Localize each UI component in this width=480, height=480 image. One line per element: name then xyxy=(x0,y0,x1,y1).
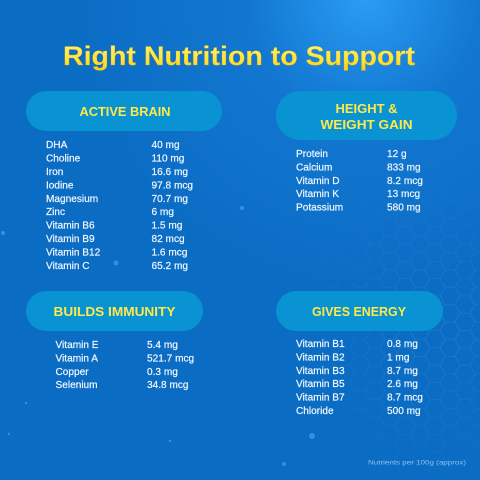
nutrient list: active brain: Zinc xyxy=(46,207,65,218)
heading pill: height and weight gain: WEIGHT GAIN xyxy=(320,117,412,132)
nutrient list: gives energy: Vitamin B7 xyxy=(296,393,345,404)
nutrient list: height and weight gain: 580 mg xyxy=(387,203,421,214)
nutrient list: gives energy: Chloride xyxy=(296,406,334,417)
nutrient list: active brain: 70.7 mg xyxy=(152,194,188,205)
nutrient list: active brain: 6 mg xyxy=(152,207,174,218)
nutrient list: builds immunity: 5.4 mg xyxy=(147,340,178,351)
nutrient list: height and weight gain xyxy=(296,149,423,214)
heading pill: builds immunity xyxy=(26,291,203,331)
heading pill: builds immunity: BUILDS IMMUNITY xyxy=(54,304,176,319)
nutrient list: builds immunity: 0.3 mg xyxy=(147,367,178,378)
nutrient list: gives energy: Vitamin B2 xyxy=(296,352,345,363)
nutrient list: builds immunity: Selenium xyxy=(56,380,98,391)
nutrient list: height and weight gain: 12 g xyxy=(387,149,407,160)
nutrient list: height and weight gain: Protein xyxy=(296,149,328,160)
heading pill: height and weight gain: HEIGHT & xyxy=(335,101,398,116)
nutrient list: gives energy: 1 mg xyxy=(387,352,409,363)
nutrient list: gives energy: 0.8 mg xyxy=(387,339,418,350)
nutrient list: active brain: Iron xyxy=(46,167,63,178)
nutrient list: active brain: 1.6 mcg xyxy=(152,248,187,259)
nutrient list: builds immunity: Vitamin E xyxy=(56,340,99,351)
nutrient list: active brain: 40 mg xyxy=(152,140,180,151)
heading pill: gives energy: GIVES ENERGY xyxy=(312,304,406,319)
nutrient list: gives energy: 8.7 mg xyxy=(387,366,418,377)
nutrient list: height and weight gain: Calcium xyxy=(296,162,332,173)
nutrient list: gives energy xyxy=(296,339,423,417)
nutrient list: active brain: 110 mg xyxy=(152,153,184,164)
panel: active brain xyxy=(26,91,222,272)
nutrient list: active brain: 82 mcg xyxy=(152,234,185,245)
nutrient list: height and weight gain: Potassium xyxy=(296,203,343,214)
panel: gives energy xyxy=(276,291,443,417)
nutrient list: active brain: DHA xyxy=(46,140,68,151)
nutrient list: builds immunity: Vitamin A xyxy=(56,353,98,364)
nutrient list: active brain: Vitamin B9 xyxy=(46,234,95,245)
heading pill: gives energy xyxy=(276,291,443,331)
nutrient list: active brain: 97.8 mcg xyxy=(152,180,193,191)
nutrient list: height and weight gain: Vitamin K xyxy=(296,189,339,200)
nutrient list: builds immunity: Copper xyxy=(56,367,89,378)
nutrient list: height and weight gain: 833 mg xyxy=(387,162,421,173)
nutrient list: gives energy: 8.7 mcg xyxy=(387,393,423,404)
nutrient list: active brain xyxy=(46,140,193,272)
heading pill: active brain xyxy=(26,91,222,131)
nutrient list: active brain: Iodine xyxy=(46,180,74,191)
nutrient list: active brain: Vitamin C xyxy=(46,261,90,272)
nutrient list: gives energy: Vitamin B3 xyxy=(296,366,345,377)
nutrient list: active brain: 1.5 mg xyxy=(152,221,182,232)
panel: height and weight gain xyxy=(276,91,457,214)
nutrient list: gives energy: 500 mg xyxy=(387,406,421,417)
nutrient list: active brain: 16.6 mg xyxy=(152,167,188,178)
nutrient list: gives energy: Vitamin B1 xyxy=(296,339,345,350)
nutrient list: active brain: Vitamin B12 xyxy=(46,248,101,259)
nutrient list: gives energy: 2.6 mg xyxy=(387,379,418,390)
footnote: Nutrients per 100g (approx) xyxy=(368,460,466,466)
nutrient list: height and weight gain: 13 mcg xyxy=(387,189,420,200)
nutrient list: active brain: Vitamin B6 xyxy=(46,221,95,232)
panel: builds immunity xyxy=(26,291,203,391)
nutrient list: builds immunity: 521.7 mcg xyxy=(147,353,194,364)
nutrient list: builds immunity: 34.8 mcg xyxy=(147,380,189,391)
nutrient list: active brain: 65.2 mg xyxy=(152,261,188,272)
nutrient list: gives energy: Vitamin B5 xyxy=(296,379,345,390)
heading pill: active brain: ACTIVE BRAIN xyxy=(80,104,170,119)
nutrient list: active brain: Choline xyxy=(46,153,81,164)
title: Right Nutrition to Support xyxy=(63,41,415,71)
nutrient list: active brain: Magnesium xyxy=(46,194,98,205)
nutrient list: builds immunity xyxy=(56,340,194,391)
nutrient list: height and weight gain: Vitamin D xyxy=(296,176,340,187)
heading pill: height and weight gain xyxy=(276,91,457,140)
nutrient list: height and weight gain: 8.2 mcg xyxy=(387,176,423,187)
